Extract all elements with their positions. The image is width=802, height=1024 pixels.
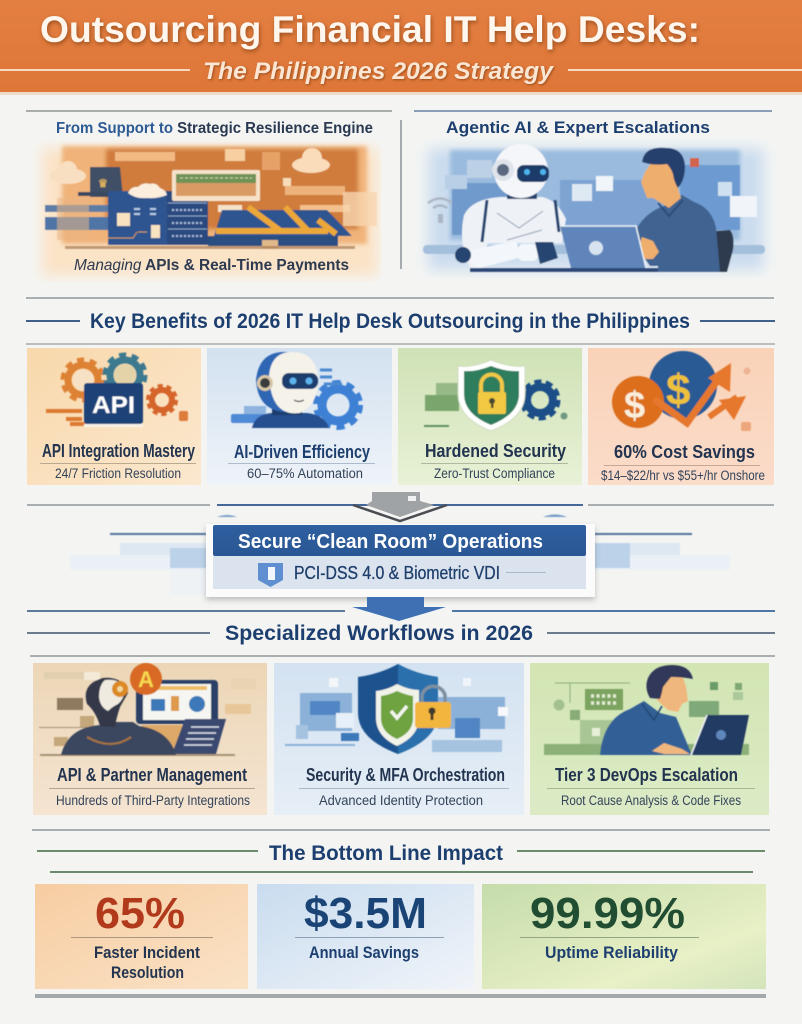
shirt [600,701,692,755]
stat: $3.5M annual savings: Annual Savings [309,943,419,962]
heading: agentic AI: Agentic AI & Expert Escalations [446,118,710,137]
illustration: engineer at laptop [544,665,749,755]
header banner [0,0,802,95]
card: security and MFA orchestration [274,663,524,815]
stat: 65% faster incident resolution: Resolution [111,963,184,982]
illustration: agent at monitor [39,663,256,755]
arrow: gray chevron into clean room [27,492,774,521]
divider [400,120,402,269]
icon: shield [258,563,283,587]
panel: secure clean room operations [206,524,595,597]
card: API integration mastery: 24/7 Friction Resolution [55,466,181,481]
card: tier 3 DevOps escalation [530,663,769,815]
icon: dollar coins and arrows: $ [666,366,690,415]
card: security and MFA orchestration: Advanced Identity Protection [319,793,483,808]
heading: strategic resilience: From Support to Strategic Resilience Engine [56,120,373,137]
icon: dollar coins and arrows: $ [624,385,645,427]
illustration: shield and padlock [285,664,508,754]
stat: $3.5M annual savings [257,884,474,989]
face [655,677,688,712]
stat: 65% faster incident resolution [35,884,248,989]
robot arm [468,241,522,268]
gold tracks [214,210,352,236]
stat: 65% faster incident resolution: Faster Incident [94,943,200,962]
card: API integration mastery: API Integration Mastery [42,441,195,461]
card: security and MFA orchestration: Security & MFA Orchestration [306,765,505,785]
card: 60% cost savings: $14–$22/hr vs $55+/hr Onshore [601,468,765,483]
robot head [494,144,548,198]
illustration: payments infrastructure: ♛ [98,178,108,190]
icon: robot and gear [231,352,360,428]
subtitle: The Philippines 2026 Strategy [203,58,555,85]
stat: $3.5M annual savings: $3.5M [304,889,427,938]
icon: gears and API box [46,355,188,427]
stat: 99.99% uptime reliability [482,884,766,989]
banner [213,525,586,556]
title: Outsourcing Financial IT Help Desks: [40,9,700,50]
card: tier 3 DevOps escalation: Tier 3 DevOps Escalation [555,765,738,785]
card: 60% cost savings [588,348,774,485]
wifi [428,198,452,208]
face and hair [641,160,681,208]
panel: secure clean room operations: PCI-DSS 4.0 & Biometric VDI [294,563,500,583]
card: hardened security [398,348,582,485]
clouds [50,168,86,184]
icon: shield with lock and gear [424,360,568,431]
card: AI-driven efficiency: AI-Driven Efficiency [234,442,370,462]
heading: key benefits: Key Benefits of 2026 IT Help Desk Outsourcing in the Philippines [90,310,690,333]
bag [90,167,123,197]
caption: managing APIs: Managing APIs & Real-Time Payments [74,257,349,274]
arrow: blue arrow to workflows [27,597,775,621]
card: AI-driven efficiency [207,348,392,485]
card: AI-driven efficiency: 60–75% Automation [247,466,363,481]
heading: specialized workflows: Specialized Workflows in 2026 [225,622,533,645]
card: hardened security: Hardened Security [425,441,566,461]
ground [65,246,355,249]
icon: gears and API box: API [92,392,135,419]
rule [32,829,770,831]
panel: secure clean room operations: Secure “Clean Room” Operations [238,531,543,553]
robot body [462,197,566,268]
stat: 65% faster incident resolution: 65% [95,889,185,938]
panel: from support to strategic resilience engine [26,110,392,276]
monitor [172,170,260,201]
rule [26,297,774,299]
chair [710,230,734,272]
illustration: agent at monitor: A [138,667,154,692]
stat: 99.99% uptime reliability: Uptime Reliability [545,943,679,962]
card: API and partner management: Hundreds of Third-Party Integrations [56,793,250,808]
decorative side bands [70,514,730,595]
card: API and partner management [33,663,267,815]
illustration: payments infrastructure [42,146,378,276]
table [423,245,765,254]
panel: agentic AI and expert escalations [414,110,772,272]
stat: 99.99% uptime reliability: 99.99% [530,889,685,938]
icon: dollar coins and arrows [612,351,751,431]
card: hardened security: Zero-Trust Compliance [434,466,555,481]
card: API and partner management: API & Partner Management [57,765,247,785]
shirt [632,195,720,272]
compliance row [213,556,586,589]
documents [572,184,592,201]
hair [646,665,693,699]
laptop [560,226,646,268]
server [108,191,208,245]
card: tier 3 DevOps escalation: Root Cause Analysis & Code Fixes [561,793,741,808]
heading: the bottom line impact: The Bottom Line Impact [269,842,503,865]
card: 60% cost savings: 60% Cost Savings [614,442,755,462]
card: API integration mastery [27,348,201,485]
white cloud [128,183,167,198]
illustration: robot and agent at a laptop [423,144,765,272]
rule [35,994,766,998]
blue stripes [45,205,110,212]
